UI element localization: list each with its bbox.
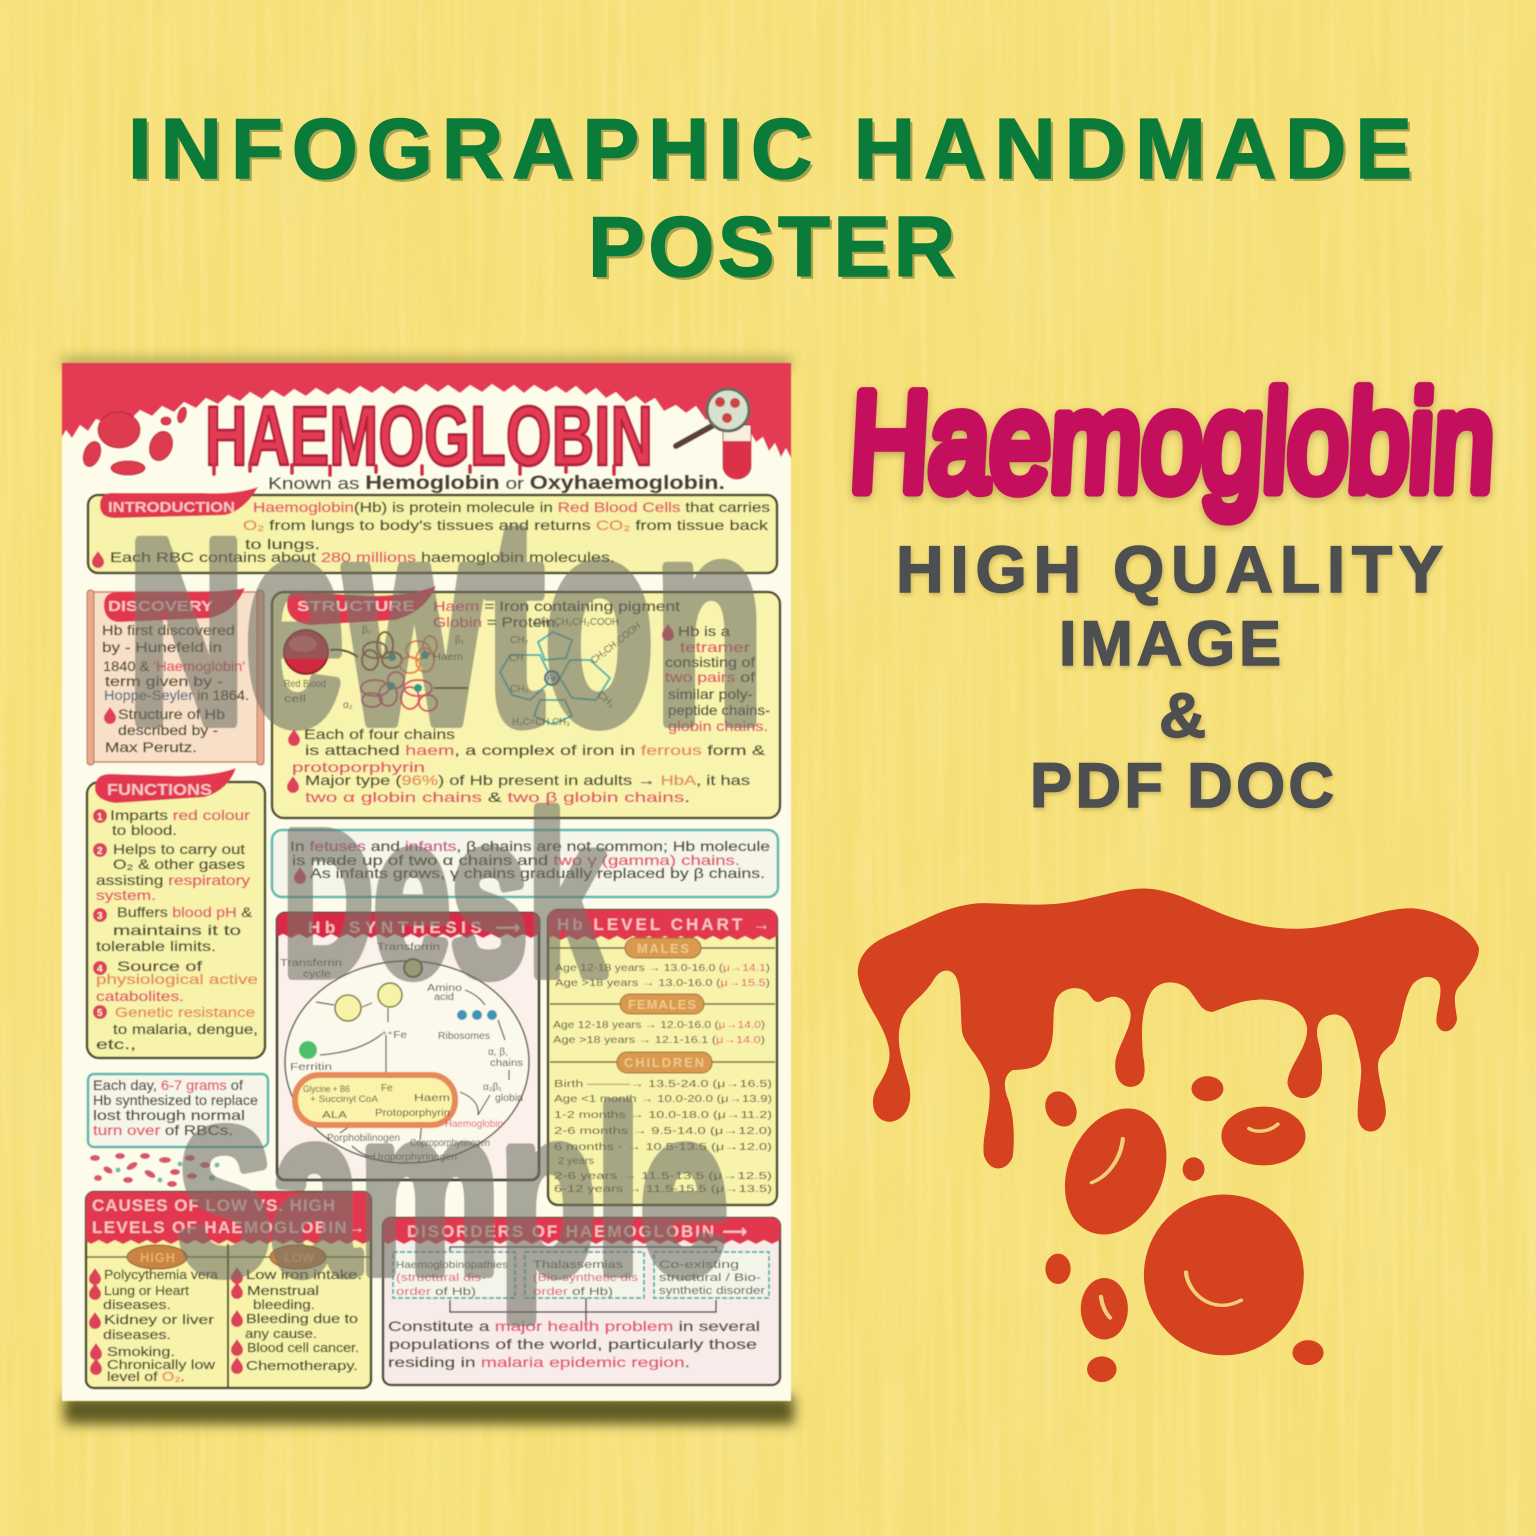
- low causes: [231, 1245, 362, 1374]
- main title: POSTER: [591, 203, 958, 298]
- panel: daily haemoglobin note: Hb synthesized to replace: [93, 1092, 258, 1108]
- structure side text: tetramer: [680, 639, 750, 655]
- children group: 6-12 years → 11.5-15.5 (μ→13.5): [554, 1184, 772, 1195]
- discovery banner: [104, 588, 245, 622]
- structure heading: STRUCTURE: [297, 598, 415, 615]
- panel: causes of low vs high levels: [86, 1192, 371, 1388]
- functions list: Buffers blood pH &: [117, 904, 253, 920]
- panel: Hb synthesis: [277, 913, 539, 1180]
- diagram: haem molecule: CH₃ CH₂CH₂COOH: [534, 617, 619, 628]
- functions list: to blood.: [112, 822, 177, 838]
- diagram: mitochondrion: ALA: [322, 1110, 347, 1121]
- icon: scattered blood cells: [90, 1153, 220, 1187]
- functions heading: FUNCTIONS: [107, 782, 212, 799]
- Hb level chart heading: Hb LEVEL CHART →: [557, 915, 770, 934]
- panel: fetuses and infants note: As infants grows, γ chains gradually replaced by β chains.: [310, 865, 765, 881]
- structure side text: consisting of: [665, 654, 755, 670]
- diagram: haem molecule: Fe: [547, 674, 557, 683]
- diagram: haem molecule: CH₂: [510, 635, 528, 646]
- diagram: mitochondrion: Protoporphyrin: [375, 1108, 450, 1119]
- diagram: cell synthesis cycle: Ferritin: [290, 1062, 332, 1073]
- panel: daily haemoglobin note: lost through normal: [93, 1107, 245, 1123]
- diagram: cell synthesis cycle: cycle: [303, 969, 332, 980]
- poster header: dripping red band: [62, 363, 791, 458]
- illustration: dripping blood with red blood cells: [858, 889, 1479, 1382]
- disorders text: Constitute a major health problem in several: [388, 1318, 760, 1334]
- diagram: cell synthesis cycle: ⁺⁺Fe: [381, 1030, 408, 1041]
- diagram: red blood cell: cell: [284, 694, 306, 705]
- diagram: cell synthesis cycle: α₂β₁: [483, 1082, 502, 1093]
- panel: fetuses and infants note: is made up of two α chains and two γ (gamma) chains.: [292, 852, 740, 868]
- poster subtitle: Known as Hemoglobin or Oxyhaemoglobin.: [268, 473, 725, 494]
- children group: 2-6 months → 9.5-14.0 (μ→12.0): [554, 1126, 772, 1137]
- low causes: Bleeding due to: [246, 1311, 358, 1326]
- diagram: haem molecule: CH₂CH₂COOH: [589, 621, 643, 666]
- discovery text: Structure of Hb: [118, 706, 225, 722]
- functions list: Source of: [117, 958, 202, 974]
- structure intro text: Haem = Iron containing pigment: [433, 598, 680, 614]
- blood cells and droplets: [1041, 1076, 1324, 1382]
- functions list: Genetic resistance: [115, 1004, 255, 1020]
- main title: [128, 102, 1415, 298]
- children group: Birth ———→ 13.5-24.0 (μ→16.5): [554, 1079, 772, 1090]
- panel: fetuses and infants note: [272, 830, 778, 897]
- product details text: [896, 532, 1443, 821]
- panel: daily haemoglobin note: [88, 1074, 268, 1147]
- discovery heading: DISCOVERY: [108, 598, 213, 615]
- panel: daily haemoglobin note: Each day, 6-7 grams of: [93, 1077, 243, 1093]
- diagram: cell synthesis cycle: Porphobilinogen: [327, 1133, 400, 1144]
- main title: INFOGRAPHIC HANDMADE: [128, 102, 1412, 197]
- introduction text: to lungs.: [245, 536, 320, 552]
- diagram: haem molecule: H₂C=CH CH₃: [512, 717, 570, 728]
- product details text: &: [1159, 681, 1206, 751]
- discovery text: Max Perutz.: [105, 739, 197, 755]
- children group: Age <1 month → 10.0-20.0 (μ→13.9): [554, 1094, 772, 1105]
- low causes: Menstrual: [247, 1283, 319, 1298]
- panel: Hb level chart: [548, 910, 777, 1205]
- functions list: assisting respiratory: [96, 872, 250, 888]
- blood drip: [858, 889, 1479, 1169]
- children group: 2 years: [558, 1156, 594, 1167]
- structure lower text: two α globin chains & two β globin chains .: [305, 789, 690, 805]
- diagram: cell synthesis cycle: [280, 942, 529, 1163]
- icon: magnifier and test tube: [676, 389, 751, 479]
- high causes: diseases.: [103, 1327, 171, 1342]
- box: haemoglobinopathies: (structural dis-: [396, 1272, 486, 1284]
- disorders header: [383, 1218, 780, 1244]
- watermark: [128, 458, 764, 1322]
- Hb synthesis heading: Hb SYNTHESIS ⟶: [308, 918, 520, 937]
- discovery text: described by -: [118, 722, 218, 738]
- high causes: Kidney or liver: [104, 1312, 215, 1327]
- icon: red blood cells: [80, 406, 188, 475]
- males group: MALES: [637, 941, 689, 956]
- females group: Age 12-18 years → 12.0-16.0 ( μ→14.0 ): [553, 1020, 765, 1031]
- diagram: cell synthesis cycle: chains: [490, 1058, 523, 1069]
- diagram: mitochondrion: Glycine + B6: [303, 1084, 350, 1094]
- Hb level chart header: [548, 910, 777, 940]
- functions list: physiological active: [96, 971, 258, 987]
- diagram: haem molecule: CH₃: [510, 684, 529, 695]
- main title: POSTER: [588, 200, 955, 295]
- functions list: catabolites.: [96, 988, 184, 1004]
- box: thalassemias: [525, 1252, 644, 1298]
- structure side text: [662, 623, 770, 734]
- panel: daily haemoglobin note: turn over of RBCs.: [93, 1122, 233, 1138]
- diagram: globin chain tangle: α₂: [343, 700, 353, 711]
- females group: FEMALES: [628, 997, 696, 1012]
- panel: structure: [272, 586, 780, 818]
- diagram: mitochondrion: [295, 1075, 455, 1125]
- cell highlights: [1092, 1124, 1278, 1318]
- diagram: globin chain tangle: Haem: [433, 652, 463, 663]
- structure lower text: is attached haem , a complex of iron in ferrous form &: [305, 742, 766, 758]
- high causes: Polycythemia vera: [104, 1267, 219, 1282]
- causes heading: [92, 1196, 365, 1237]
- children group: 2-6 years → 11.5-13.5 (μ→12.5): [554, 1171, 772, 1182]
- introduction heading: INTRODUCTION: [108, 499, 235, 516]
- structure intro text: [433, 598, 680, 630]
- functions list: etc.,: [96, 1036, 136, 1052]
- watermark: Sample: [178, 1063, 728, 1322]
- diagram: cell synthesis cycle: Transferrin: [280, 958, 342, 969]
- children group: [554, 1052, 772, 1195]
- product details text: IMAGE: [1059, 609, 1281, 679]
- diagram: cell synthesis cycle: α, β,: [488, 1047, 508, 1058]
- diagram: globin chain tangle: β₁: [455, 635, 465, 646]
- poster: haemoglobin handmade infographic: [62, 363, 791, 1401]
- discovery text: Hoppe-Seyler in 1864.: [104, 687, 249, 703]
- males group: Age >18 years → 13.0-16.0 ( μ→15.5 ): [555, 978, 770, 989]
- diagram: cell synthesis cycle: Uroporphyrinogen: [373, 1152, 457, 1163]
- low causes: any cause.: [245, 1326, 317, 1341]
- functions list: [93, 807, 258, 1052]
- structure banner: [287, 586, 436, 625]
- high causes: [89, 1245, 219, 1384]
- males group: Age 12-18 years → 13.0-16.0 ( μ→14.1 ): [555, 963, 770, 974]
- causes heading: CAUSES OF LOW VS. HIGH: [92, 1196, 335, 1215]
- functions list: to malaria, dengue,: [113, 1021, 258, 1037]
- diagram: haem molecule: CH₃: [595, 690, 616, 710]
- structure intro text: Globin = Protein.: [433, 614, 560, 630]
- functions list: 2: [97, 846, 103, 857]
- functions list: 1: [97, 812, 103, 823]
- causes header: [86, 1192, 371, 1244]
- introduction text: [92, 499, 770, 568]
- introduction text: Each RBC contains about 280 millions haemoglobin molecules.: [110, 549, 615, 565]
- diagram: red blood cell: [284, 630, 358, 705]
- diagram: cell synthesis cycle: Coproporphyrinogen: [410, 1138, 490, 1149]
- functions list: 5: [97, 1008, 103, 1019]
- main title: INFOGRAPHIC HANDMADE: [131, 105, 1415, 200]
- children group: CHILDREN: [624, 1055, 704, 1070]
- functions list: maintains it to: [113, 922, 241, 938]
- disorders text: residing in malaria epidemic region .: [388, 1354, 690, 1370]
- functions list: tolerable limits.: [96, 938, 216, 954]
- diagram: cell synthesis cycle: Transferrin: [377, 942, 440, 953]
- discovery text: 1840 & 'Haemoglobin': [103, 658, 245, 674]
- causes heading: LEVELS OF HAEMOGLOBIN→: [92, 1218, 365, 1237]
- box: co-existing: Co-existing: [659, 1259, 739, 1271]
- children group: 6 months - → 10.5-13.5 (μ→12.0): [554, 1142, 772, 1153]
- high causes: Lung or Heart: [104, 1283, 189, 1298]
- high causes: Smoking.: [107, 1344, 175, 1359]
- box: haemoglobinopathies: order of Hb): [396, 1286, 476, 1298]
- panel: discovery scroll: [87, 588, 264, 765]
- discovery text: by - Hunefeld in: [102, 639, 222, 655]
- panel: fetuses and infants note: In fetuses and infants , β chains are not common; Hb molecule: [290, 838, 770, 854]
- diagram: cell synthesis cycle: acid: [434, 992, 454, 1003]
- watermark: Newton: [128, 458, 764, 784]
- functions list: system.: [96, 887, 156, 903]
- box: thalassemias: Thalassemias: [533, 1259, 624, 1271]
- low causes: Blood cell cancer.: [247, 1340, 359, 1355]
- functions banner: [95, 768, 236, 803]
- discovery text: Hb first discovered: [102, 622, 235, 638]
- box: co-existing: [654, 1252, 769, 1298]
- panel: introduction: [88, 487, 777, 573]
- low causes: LOW: [284, 1250, 315, 1265]
- product details text: PDF DOC: [1030, 751, 1334, 821]
- functions list: O₂ & other gases: [113, 856, 245, 872]
- Hb synthesis header: [277, 913, 539, 938]
- structure side text: Hb is a: [678, 623, 730, 639]
- poster drop shadow: [62, 358, 794, 1424]
- high causes: HIGH: [140, 1250, 175, 1265]
- diagram: globin chain tangle: β₂: [362, 625, 372, 636]
- panel: disorders of haemoglobin: [383, 1218, 780, 1385]
- diagram: cell synthesis cycle: Haemoglobin: [445, 1119, 503, 1130]
- high causes: Chronically low: [107, 1357, 216, 1372]
- box: haemoglobinopathies: [393, 1252, 515, 1298]
- introduction banner: [100, 487, 258, 518]
- disorders text: [388, 1318, 760, 1370]
- diagram: haem molecule: CH: [509, 653, 523, 664]
- discovery text: term given by -: [105, 673, 223, 689]
- diagram: mitochondrion: Fe: [381, 1083, 393, 1094]
- introduction text: Haemoglobin (Hb) is protein molecule in Red Blood Cells that carries: [253, 499, 770, 515]
- discovery text: [102, 622, 249, 755]
- structure side text: similar poly-: [668, 686, 753, 702]
- low causes: Chemotherapy.: [246, 1358, 358, 1373]
- high causes: level of O₂ .: [107, 1369, 185, 1384]
- watermark: Desk: [283, 769, 606, 1023]
- panel: functions: [87, 768, 265, 1058]
- diagram: cell synthesis cycle: globin: [495, 1093, 523, 1104]
- functions list: Imparts red colour: [110, 807, 250, 823]
- diagram: mitochondrion: Haem: [414, 1093, 450, 1104]
- diagram: haem molecule: [500, 617, 643, 728]
- structure lower text: Each of four chains: [304, 726, 455, 742]
- structure side text: globin chains.: [668, 718, 768, 734]
- children group: 1-2 months → 10.0-18.0 (μ→11.2): [554, 1110, 772, 1121]
- females group: Age >18 years → 12.1-16.1 ( μ→14.0 ): [553, 1035, 765, 1046]
- males group: [555, 938, 770, 989]
- box: thalassemias: (Bio-synthetic dis: [533, 1272, 639, 1284]
- diagram: cell synthesis cycle: Ribosomes: [438, 1031, 490, 1042]
- structure lower text: [287, 726, 766, 805]
- introduction text: O₂ from lungs to body's tissues and returns CO₂ from tissue back: [243, 517, 769, 533]
- structure lower text: protoporphyrin: [292, 759, 425, 775]
- diagram: globin chain tangle: [343, 625, 468, 711]
- disorders text: populations of the world, particularly those: [389, 1336, 757, 1352]
- low causes: Low iron intake.: [246, 1267, 362, 1282]
- box: co-existing: synthetic disorder: [659, 1285, 765, 1297]
- product details text: HIGH QUALITY: [896, 532, 1443, 606]
- high causes: diseases.: [103, 1297, 171, 1312]
- diagram: mitochondrion: + Succinyl CoA: [310, 1094, 378, 1104]
- structure side text: peptide chains-: [668, 702, 770, 718]
- functions list: 3: [97, 911, 103, 922]
- disorders brackets: [450, 1247, 716, 1322]
- low causes: bleeding.: [253, 1297, 315, 1312]
- females group: [553, 994, 765, 1046]
- diagram: red blood cell: Red Blood: [284, 679, 326, 690]
- structure side text: two pairs of: [665, 669, 755, 685]
- box: thalassemias: order of Hb): [533, 1286, 613, 1298]
- disorders heading: DISORDERS OF HAEMOGLOBIN ⟶: [407, 1222, 747, 1241]
- poster title: HAEMOGLOBIN: [205, 389, 653, 483]
- box: co-existing: structural / Bio-: [659, 1272, 761, 1284]
- box: haemoglobinopathies: Haemoglobinopathies: [396, 1260, 508, 1271]
- functions list: 4: [97, 964, 103, 975]
- functions list: Helps to carry out: [113, 841, 245, 857]
- diagram: cell synthesis cycle: Amino: [427, 983, 463, 994]
- structure lower text: Major type ( 96% ) of Hb present in adults → HbA , it has: [305, 772, 750, 788]
